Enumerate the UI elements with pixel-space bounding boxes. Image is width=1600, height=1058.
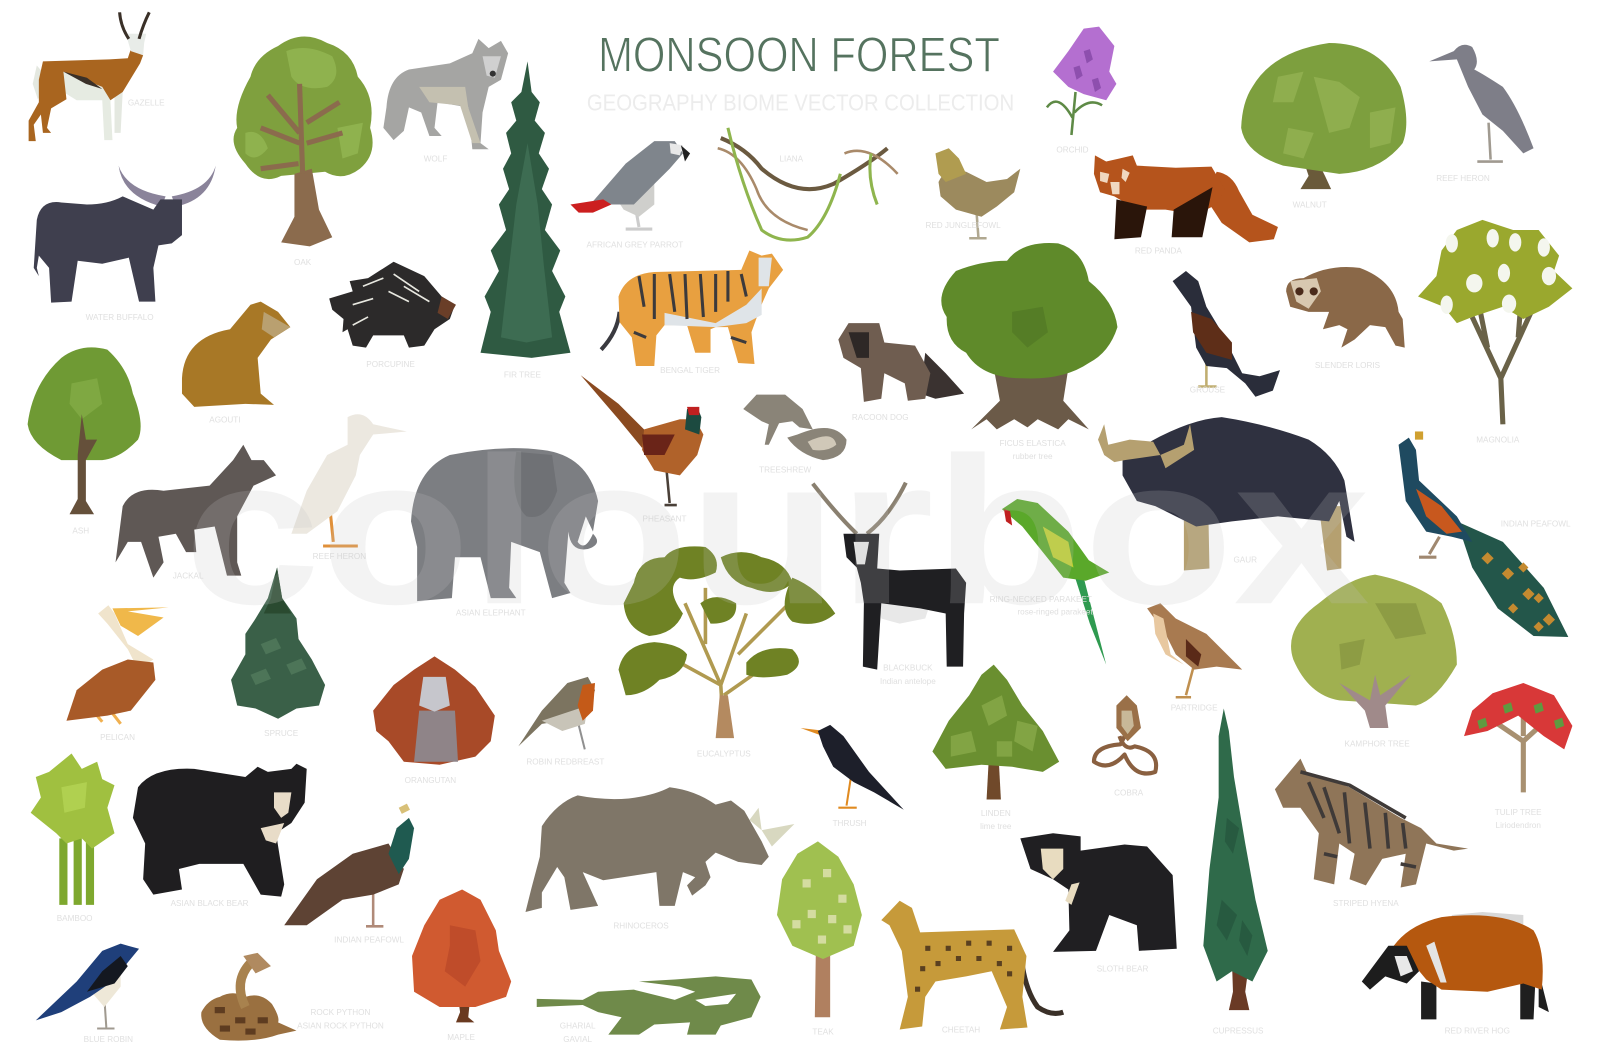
tree: walnut xyxy=(1241,43,1406,210)
tree: cupressus xyxy=(1203,709,1268,1036)
animal: gaur xyxy=(1098,417,1355,571)
animal: cheetah xyxy=(881,901,1063,1035)
tree: oak xyxy=(234,37,373,267)
caption: RED RIVER HOG xyxy=(1445,1027,1510,1036)
caption: LIANA xyxy=(780,155,804,164)
caption: TULIP TREE xyxy=(1495,808,1542,817)
subtitle: GEOGRAPHY BIOME VECTOR COLLECTION xyxy=(587,89,1014,115)
caption: RHINOCEROS xyxy=(613,921,669,930)
animal: blackbuck: Indian antelope xyxy=(880,677,936,686)
caption: THRUSH xyxy=(833,819,867,828)
tree: spruce xyxy=(231,567,325,738)
tree: teak xyxy=(777,841,862,1037)
caption: RING-NECKED PARAKEET xyxy=(990,595,1092,604)
bird: partridge xyxy=(1147,603,1242,713)
plant: liana xyxy=(718,128,898,240)
caption: AGOUTI xyxy=(209,415,241,424)
animal: orangutan xyxy=(373,656,495,785)
caption: SLOTH BEAR xyxy=(1097,964,1148,973)
bird: reef heron xyxy=(1429,45,1534,183)
caption: REEF HERON xyxy=(313,552,366,561)
caption: AFRICAN GREY PARROT xyxy=(587,240,683,249)
animal: gazelle xyxy=(29,12,165,141)
tree: camphor xyxy=(1291,575,1457,748)
caption: PHEASANT xyxy=(643,514,687,523)
animal: red river hog xyxy=(1362,912,1549,1036)
animal: raccoon dog xyxy=(838,323,964,422)
animal: rock python xyxy=(201,953,384,1041)
caption: BENGAL TIGER xyxy=(660,366,720,375)
animal: treeshrew xyxy=(743,395,847,474)
caption: REEF HERON xyxy=(1436,174,1490,183)
bird: pelican xyxy=(66,605,169,742)
caption: PELICAN xyxy=(100,733,135,742)
bird: pheasant xyxy=(581,375,703,523)
bird: indian peafowl xyxy=(284,804,414,945)
animal: asian elephant xyxy=(411,448,598,617)
bird: robin redbreast xyxy=(518,677,604,767)
bird: blue robin xyxy=(36,944,139,1044)
caption: GHARIAL xyxy=(560,1022,596,1031)
caption: WATER BUFFALO xyxy=(86,313,154,322)
animal: striped hyena xyxy=(1275,759,1468,908)
title: MONSOON FOREST xyxy=(598,29,1000,83)
animal: agouti xyxy=(182,302,290,424)
caption: PARTRIDGE xyxy=(1171,704,1218,713)
animal: water buffalo xyxy=(34,166,216,322)
bird: african grey parrot xyxy=(570,141,690,249)
plant: bamboo xyxy=(31,754,115,923)
caption: GROUSE xyxy=(1190,386,1226,395)
caption: RACOON DOG xyxy=(852,413,909,422)
tree: maple xyxy=(412,889,511,1042)
bird: grouse xyxy=(1173,271,1280,397)
tree: magnolia xyxy=(1418,220,1572,445)
caption: OAK xyxy=(294,258,312,267)
animal: rock python: ASIAN ROCK PYTHON xyxy=(297,1022,384,1031)
tree: linden xyxy=(932,665,1059,831)
caption: SLENDER LORIS xyxy=(1315,361,1381,370)
caption: EUCALYPTUS xyxy=(697,750,751,759)
animal: slender loris xyxy=(1286,267,1405,370)
tree: ficus elastica xyxy=(941,243,1117,461)
animal: sloth bear xyxy=(1020,833,1177,973)
caption: KAMPHOR TREE xyxy=(1345,739,1410,748)
caption: FICUS ELASTICA xyxy=(1000,439,1066,448)
animal: bengal tiger xyxy=(601,251,783,375)
tree: ficus elastica: rubber tree xyxy=(1013,452,1053,461)
caption: BAMBOO xyxy=(57,914,93,923)
animal: jackal xyxy=(116,445,276,581)
caption: JACKAL xyxy=(173,572,204,581)
bird: egret xyxy=(291,414,407,561)
caption: RED JUNGLEFOWL xyxy=(925,221,1001,230)
animal: asian black bear xyxy=(133,764,307,908)
bird: thrush xyxy=(801,725,904,828)
bird: ring-necked parakeet xyxy=(990,499,1109,665)
caption: SPRUCE xyxy=(264,729,299,738)
caption: ORCHID xyxy=(1056,145,1089,154)
animal: porcupine xyxy=(329,262,456,369)
tree: linden: lime tree xyxy=(980,822,1012,831)
caption: FIR TREE xyxy=(504,370,541,379)
caption: MAPLE xyxy=(447,1033,475,1042)
caption: GAUR xyxy=(1233,555,1257,564)
tree: fir xyxy=(481,61,570,379)
animal: gharial xyxy=(537,976,761,1044)
caption: ASH xyxy=(72,527,89,536)
caption: BLACKBUCK xyxy=(883,664,933,673)
animal: gharial: GAVIAL xyxy=(563,1035,593,1044)
caption: ROBIN REDBREAST xyxy=(526,758,604,767)
caption: WOLF xyxy=(424,155,447,164)
caption: ASIAN ELEPHANT xyxy=(456,608,526,617)
caption: TREESHREW xyxy=(759,465,812,474)
animal: rhinoceros xyxy=(525,787,794,930)
watermark: colourbox xyxy=(184,414,1370,648)
caption: MAGNOLIA xyxy=(1476,436,1520,445)
caption: CHEETAH xyxy=(942,1026,980,1035)
animal: blackbuck xyxy=(813,483,966,686)
caption: ASIAN BLACK BEAR xyxy=(171,899,249,908)
caption: COBRA xyxy=(1114,788,1144,797)
caption: ROCK PYTHON xyxy=(311,1008,370,1017)
caption: ORANGUTAN xyxy=(405,776,456,785)
bird: red junglefowl xyxy=(925,148,1020,238)
caption: CUPRESSUS xyxy=(1213,1027,1264,1036)
bird: ring-necked parakeet: rose-ringed parakeet xyxy=(1017,607,1093,616)
caption: TEAK xyxy=(812,1028,834,1037)
caption: INDIAN PEAFOWL xyxy=(334,936,404,945)
caption: INDIAN PEAFOWL xyxy=(1501,520,1571,529)
tree: ash xyxy=(28,347,141,536)
caption: PORCUPINE xyxy=(366,360,415,369)
plant: orchid xyxy=(1047,27,1116,154)
tree: eucalyptus xyxy=(619,546,835,759)
caption: WALNUT xyxy=(1293,201,1327,210)
animal: red panda xyxy=(1094,155,1278,256)
tree: tulip tree xyxy=(1464,683,1572,830)
caption: LINDEN xyxy=(981,809,1011,818)
caption: STRIPED HYENA xyxy=(1333,899,1399,908)
caption: BLUE ROBIN xyxy=(84,1035,133,1044)
bird: indian peacock xyxy=(1399,431,1571,637)
animal: wolf xyxy=(383,39,508,164)
animal: cobra xyxy=(1094,695,1156,797)
caption: RED PANDA xyxy=(1135,247,1182,256)
caption: GAZELLE xyxy=(128,98,165,107)
tree: tulip tree: Liriodendron xyxy=(1496,821,1541,830)
